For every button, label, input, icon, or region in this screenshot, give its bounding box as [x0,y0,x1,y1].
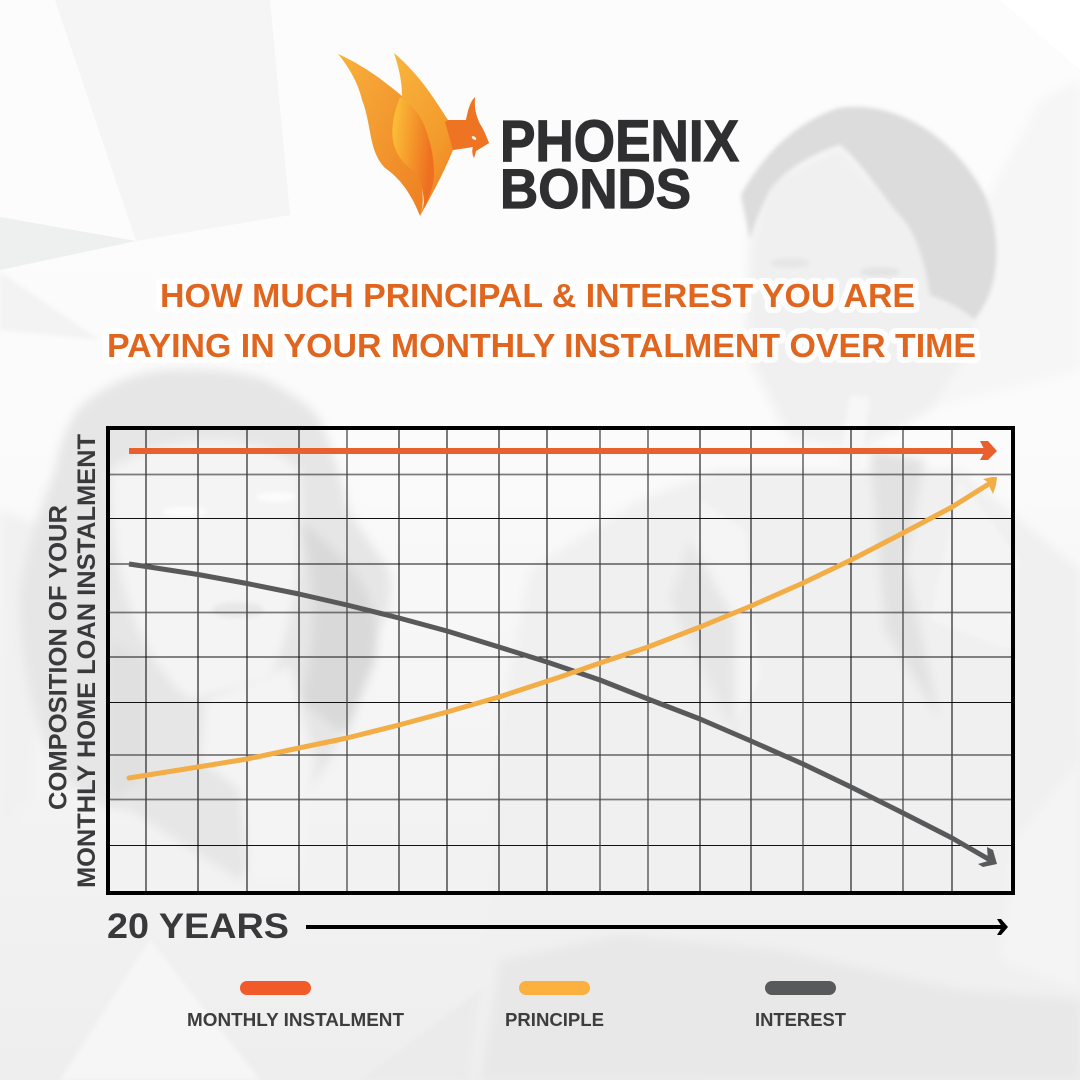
chart frame [108,428,1013,893]
y axis label: MONTHLY HOME LOAN INSTALMENT [73,434,101,888]
y axis label: COMPOSITION OF YOUR [44,505,72,810]
line: interest [129,564,997,867]
line: monthly instalment [129,441,997,460]
legend [187,981,846,1030]
legend: interest: INTEREST [755,1010,846,1030]
title: HOW MUCH PRINCIPAL & INTEREST YOU ARE [160,278,915,315]
icon: phoenix bird [338,53,489,216]
y axis label [44,434,101,888]
legend: principle [505,981,604,1030]
man: head and hair [741,107,996,470]
wordmark [500,109,739,220]
legend: monthly instalment [187,981,404,1030]
chart grid [110,430,1011,891]
legend: interest [755,981,846,1030]
x axis label and arrow: 20 YEARS [107,907,289,946]
x axis label and arrow [107,907,1008,946]
legend: principle: PRINCIPLE [505,1010,604,1030]
wordmark: BONDS [500,157,691,220]
woman: hair, face and hand [20,369,391,880]
wordmark: PHOENIX [500,109,739,174]
logo: Phoenix Bonds [338,53,739,220]
line: principle [129,477,997,778]
title [107,278,976,365]
legend: monthly instalment: MONTHLY INSTALMENT [187,1010,404,1030]
man: shirt and arms [470,450,1080,1080]
title: PAYING IN YOUR MONTHLY INSTALMENT OVER TIME [107,328,976,365]
arrow: time [306,919,1008,935]
line chart [108,428,1013,893]
